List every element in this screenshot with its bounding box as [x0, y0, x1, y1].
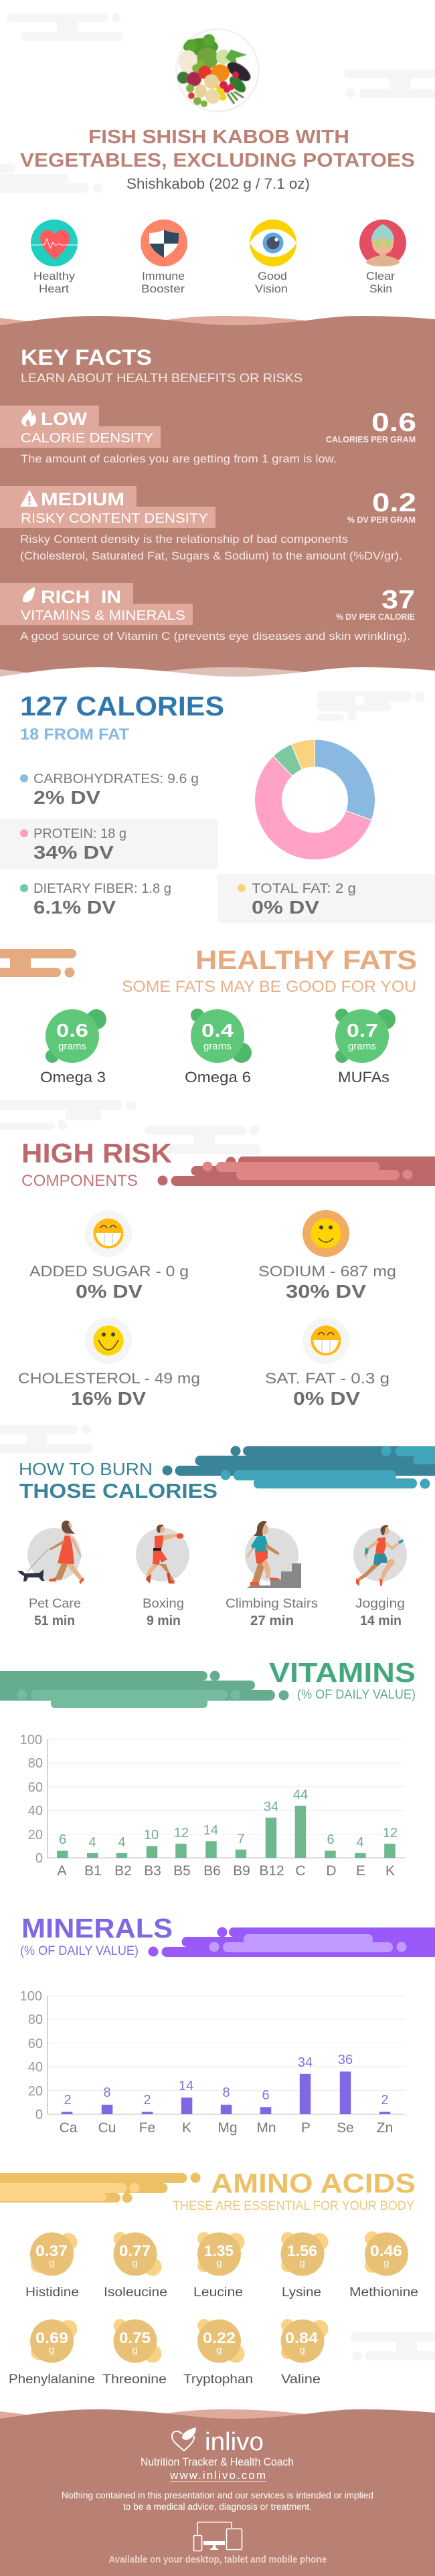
x axis labels — [60, 2120, 393, 2136]
title: FISH SHISH KABOB WITH — [88, 126, 349, 148]
bar value labels: 14 — [203, 1823, 218, 1838]
benefit: good vision: Good — [258, 270, 287, 282]
x axis labels: C — [295, 1863, 306, 1879]
amino acid: methionine — [349, 2231, 418, 2300]
x axis labels: Zn — [377, 2120, 393, 2136]
fat: omega 3: Omega 3 — [40, 1069, 106, 1086]
background cloud: above high risk — [145, 1126, 261, 1154]
decorative bars: vitamins — [0, 1670, 289, 1708]
benefit: good vision: Vision — [255, 282, 288, 295]
icon: grinning face — [94, 1218, 123, 1249]
y axis labels: 100 — [20, 1733, 42, 1747]
activity: climbing stairs: 27 min — [250, 1614, 294, 1628]
amino acid: isoleucine: g — [133, 2257, 138, 2269]
subheading: healthy fats: SOME FATS MAY BE GOOD FOR YOU — [122, 978, 416, 996]
fact: medium risky content density: 0.2 — [372, 489, 416, 517]
panel: healthy fats — [0, 946, 417, 1086]
y axis labels: 80 — [28, 1756, 43, 1771]
benefit: clear skin — [359, 220, 406, 295]
bar value labels: 14 — [179, 2079, 193, 2093]
bar value labels: 6 — [262, 2088, 270, 2103]
icon: stairs and woman — [246, 1521, 301, 1588]
legend: total fat — [217, 874, 435, 923]
bar value labels: 4 — [88, 1835, 96, 1850]
amino acid: valine — [281, 2319, 328, 2387]
bar value labels: 10 — [144, 1828, 159, 1842]
fact: rich in vitamins and minerals: % DV PER CALORIE — [336, 612, 415, 622]
decorative cloud: healthy fats — [0, 949, 76, 977]
bar value labels: 2 — [64, 2093, 72, 2108]
amino acid: methionine: g — [383, 2257, 389, 2269]
bar value labels — [64, 2053, 389, 2108]
benefit: healthy heart: Heart — [39, 282, 69, 295]
amino acid: histidine — [25, 2233, 79, 2300]
amino acid: histidine: g — [49, 2257, 54, 2269]
fact: rich in vitamins and minerals: VITAMINS & MINERALS — [21, 608, 185, 623]
subheading: components: COMPONENTS — [21, 1172, 138, 1190]
decorative bars: burn — [162, 1446, 435, 1488]
legend: carbohydrates: CARBOHYDRATES: 9.6 g — [33, 772, 199, 786]
legend: dietary fiber: DIETARY FIBER: 1.8 g — [33, 881, 171, 896]
fact: medium risky content density: MEDIUM — [41, 489, 124, 509]
fact: rich in vitamins and minerals: RICH IN — [41, 587, 121, 607]
y axis labels: 100 — [20, 1989, 42, 2004]
y axis labels: 40 — [28, 2060, 43, 2075]
decorative bars: high risk — [158, 1156, 435, 1186]
activity: boxing: Boxing — [143, 1597, 184, 1611]
amino acid: tryptophan — [183, 2319, 253, 2387]
icon: warning triangle — [20, 490, 38, 507]
amino acid: leucine: 1.35 — [204, 2242, 234, 2259]
bar value labels: 8 — [222, 2085, 230, 2100]
activity: boxing: 9 min — [147, 1614, 181, 1628]
y axis labels: 80 — [28, 2012, 43, 2027]
amino acid: isoleucine: Isoleucine — [104, 2286, 167, 2300]
risk item: cholesterol — [18, 1317, 200, 1409]
fat: mufas: 0.7 — [347, 1020, 378, 1041]
legend: carbohydrates: 2% DV — [33, 787, 100, 808]
x axis labels: K — [385, 1863, 395, 1879]
amino acid: valine: 0.84 — [285, 2329, 318, 2346]
heading: how to burn: HOW TO BURN — [19, 1459, 153, 1479]
heading: vitamins: VITAMINS — [269, 1657, 416, 1688]
amino acid: phenylalanine: 0.69 — [35, 2329, 68, 2346]
x axis labels: Ca — [60, 2120, 78, 2136]
bar value labels: 44 — [293, 1788, 308, 1802]
x axis labels: P — [301, 2120, 311, 2136]
subheading: 18 from fat: 18 FROM FAT — [20, 725, 129, 744]
benefit: immune booster: Booster — [141, 282, 185, 295]
benefit: immune booster: Immune — [142, 270, 185, 282]
fat: mufas — [335, 1009, 396, 1086]
panel: calories — [0, 691, 435, 923]
amino acid: threonine: g — [133, 2344, 138, 2356]
amino acid: threonine: Threonine — [102, 2373, 167, 2387]
icon: big smile face — [94, 1325, 123, 1356]
bar value labels: 4 — [118, 1835, 126, 1850]
y axis labels — [20, 1989, 43, 2122]
panel: high risk components — [18, 1138, 435, 1409]
fact: medium risky content density: Risky Content density is the relationship of bad components — [20, 533, 348, 545]
amino acid: phenylalanine — [9, 2320, 95, 2387]
fact: low calorie density: 0.6 — [371, 408, 416, 437]
amino acid: valine: Valine — [281, 2373, 321, 2387]
x axis labels: K — [182, 2120, 191, 2136]
benefit: immune booster — [141, 220, 187, 295]
x axis labels: Mg — [217, 2120, 238, 2136]
icon: jogger — [356, 1525, 404, 1587]
x axis labels: B6 — [203, 1863, 221, 1879]
title: VEGETABLES, EXCLUDING POTATOES — [20, 150, 415, 171]
bar value labels: 34 — [264, 1800, 278, 1814]
risk item: sodium: 30% DV — [286, 1281, 366, 1302]
icon: boxer — [146, 1525, 183, 1583]
panel: footer — [0, 2409, 435, 2576]
amino acid: leucine — [193, 2232, 245, 2300]
fat: omega 3: 0.6 — [56, 1020, 88, 1041]
benefit: clear skin: Clear — [366, 270, 395, 282]
bar chart: vitamins — [20, 1733, 405, 1879]
icon: grinning face — [311, 1325, 341, 1356]
fact: rich in vitamins and minerals: A good source of Vitamin C (prevents eye diseases and skin wrinkling). — [20, 630, 410, 642]
subheading: percent of daily value: (% OF DAILY VALUE) — [20, 1944, 139, 1958]
x axis labels: B2 — [114, 1863, 132, 1879]
icon: smiling face — [311, 1218, 341, 1249]
background cloud: calories — [317, 691, 424, 721]
bar value labels: 2 — [381, 2093, 389, 2108]
x axis labels: B5 — [173, 1863, 191, 1879]
benefit: healthy heart — [31, 220, 78, 295]
activity: climbing stairs: Climbing Stairs — [226, 1597, 318, 1611]
amino acid: tryptophan: 0.22 — [203, 2329, 236, 2346]
risk item: sodium — [258, 1210, 396, 1302]
activity: jogging: 14 min — [360, 1614, 402, 1628]
background cloud: amino acids right — [351, 2332, 435, 2360]
risk item: cholesterol: 16% DV — [71, 1388, 146, 1409]
fat: omega 3 — [40, 1009, 106, 1086]
x axis labels — [57, 1863, 395, 1879]
food photo: vegetables in a circle — [177, 29, 258, 111]
background cloud: below healthy fats — [0, 1100, 137, 1130]
amino acid: methionine: Methionine — [349, 2286, 418, 2300]
bars — [57, 1806, 396, 1858]
activity: climbing stairs — [226, 1521, 318, 1628]
risk item: saturated fat — [265, 1317, 389, 1409]
subheading: key facts: LEARN ABOUT HEALTH BENEFITS OR RISKS — [21, 371, 302, 385]
legend: protein — [0, 819, 218, 869]
tagline: Nutrition Tracker & Health Coach — [141, 2456, 294, 2468]
donut chart: macronutrients — [255, 740, 375, 860]
fact: medium risky content density: RISKY CONTENT DENSITY — [21, 511, 208, 526]
decorative bars: minerals — [149, 1927, 435, 1957]
bar value labels: 34 — [298, 2055, 313, 2070]
benefit: good vision — [250, 220, 296, 295]
panel: minerals — [20, 1913, 435, 2136]
background cloud: above burn section — [0, 1425, 93, 1453]
wave: top edge of key facts panel — [0, 316, 435, 336]
y axis labels: 20 — [28, 2084, 43, 2099]
activity: pet care: 51 min — [34, 1614, 75, 1628]
amino acid: tryptophan: Tryptophan — [183, 2373, 253, 2387]
bar value labels: 8 — [103, 2085, 111, 2100]
x axis labels: B1 — [84, 1863, 102, 1879]
x axis labels: Se — [337, 2120, 354, 2136]
heading: those calories: THOSE CALORIES — [19, 1479, 217, 1502]
bar value labels: 6 — [59, 1832, 66, 1847]
activity: boxing — [136, 1525, 189, 1628]
amino acid: isoleucine — [104, 2232, 167, 2300]
fat: omega 3: grams — [58, 1041, 86, 1052]
x axis labels: A — [57, 1863, 67, 1879]
fact: rich in vitamins and minerals — [0, 583, 415, 642]
decorative bars: amino acids — [0, 2172, 201, 2203]
bar value labels: 6 — [327, 1832, 335, 1847]
legend: total fat: 0% DV — [252, 897, 319, 918]
wave: top edge of footer — [0, 2409, 435, 2429]
amino acid: leucine: Leucine — [193, 2286, 243, 2300]
legend: dietary fiber: 6.1% DV — [33, 897, 116, 918]
amino acid: threonine: 0.75 — [119, 2329, 151, 2346]
title — [20, 126, 415, 171]
amino acid: phenylalanine: g — [49, 2344, 54, 2356]
amino acid: histidine: Histidine — [25, 2286, 79, 2300]
y axis labels: 20 — [28, 1828, 43, 1842]
amino acid: leucine: g — [216, 2257, 222, 2269]
fact: low calorie density: CALORIE DENSITY — [21, 430, 153, 446]
bar value labels: 36 — [338, 2053, 353, 2067]
fact: low calorie density: The amount of calories you are getting from 1 gram is low. — [21, 453, 337, 465]
bar value labels: 2 — [143, 2093, 151, 2108]
fat: omega 6: 0.4 — [201, 1020, 234, 1041]
y axis labels: 0 — [35, 2108, 43, 2122]
benefit: clear skin: Skin — [369, 282, 392, 295]
disclaimer — [62, 2490, 373, 2512]
risk item: added sugar — [29, 1210, 189, 1302]
website link: www.inlivo.com — [169, 2469, 266, 2482]
fact: low calorie density: LOW — [41, 409, 88, 429]
panel: key facts — [0, 316, 435, 687]
amino acid: isoleucine: 0.77 — [119, 2242, 151, 2259]
background cloud: top right — [344, 70, 435, 98]
background cloud: top left — [7, 13, 123, 41]
x axis labels: B9 — [233, 1863, 250, 1879]
icon: desktop, tablet and phone — [194, 2522, 242, 2551]
x axis labels: B12 — [259, 1863, 284, 1879]
activity: jogging: Jogging — [355, 1597, 405, 1611]
risk item: saturated fat: 0% DV — [293, 1388, 360, 1409]
logo: inlivo heart and leaf — [172, 2427, 264, 2456]
fact: medium risky content density — [0, 486, 416, 562]
fat: omega 6 — [185, 1009, 252, 1086]
x axis labels: E — [356, 1863, 365, 1879]
x axis labels: B3 — [144, 1863, 161, 1879]
bar value labels — [59, 1788, 398, 1850]
heading: minerals: MINERALS — [21, 1913, 173, 1944]
fact: low calorie density — [0, 406, 416, 465]
risk item: added sugar: ADDED SUGAR - 0 g — [29, 1263, 189, 1280]
heading: amino acids: AMINO ACIDS — [211, 2168, 416, 2199]
subtitle: serving size: Shishkabob (202 g / 7.1 oz) — [126, 175, 310, 192]
subheading: amino acids: THESE ARE ESSENTIAL FOR YOUR BODY — [173, 2199, 414, 2213]
y axis labels: 0 — [35, 1851, 43, 1866]
x axis labels: D — [326, 1863, 337, 1879]
disclaimer: to be a medical advice, diagnosis or treatment. — [123, 2502, 312, 2512]
bar value labels: 4 — [356, 1835, 364, 1850]
icon: flame — [21, 409, 36, 426]
disclaimer: Nothing contained in this presentation and our services is intended or implied — [62, 2490, 373, 2500]
amino acid: valine: g — [300, 2344, 305, 2356]
fact: low calorie density: CALORIES PER GRAM — [326, 434, 416, 444]
legend: protein: 34% DV — [33, 842, 114, 863]
heading: 127 calories: 127 CALORIES — [20, 691, 224, 721]
amino acid: lysine: Lysine — [282, 2286, 321, 2300]
x axis labels: Fe — [139, 2120, 155, 2136]
bar value labels: 7 — [237, 1832, 245, 1847]
fat: mufas: grams — [348, 1041, 376, 1052]
risk item: added sugar: 0% DV — [76, 1281, 143, 1302]
fact: medium risky content density: % DV PER GRAM — [347, 515, 416, 525]
y axis labels — [20, 1733, 43, 1866]
activity: pet care — [17, 1521, 84, 1628]
bar value labels: 12 — [383, 1826, 398, 1840]
amino acid: lysine: 1.56 — [287, 2242, 317, 2259]
legend: carbohydrates — [20, 772, 199, 808]
bar chart: minerals — [20, 1989, 405, 2136]
availability note: Available on your desktop, tablet and mobile phone — [108, 2555, 327, 2565]
amino acid: lysine — [281, 2232, 328, 2300]
bars — [62, 2071, 390, 2114]
activity: pet care: Pet Care — [29, 1597, 81, 1611]
fat: omega 6: Omega 6 — [185, 1069, 251, 1086]
heading: healthy fats: HEALTHY FATS — [195, 946, 417, 975]
y axis labels: 60 — [28, 1780, 43, 1795]
panel: vitamins — [0, 1657, 416, 1879]
subheading: percent of daily value: (% OF DAILY VALUE) — [297, 1688, 416, 1702]
amino acid: tryptophan: g — [216, 2344, 222, 2356]
fat: omega 6: grams — [203, 1041, 232, 1052]
fact: rich in vitamins and minerals: 37 — [381, 586, 415, 614]
amino acid: phenylalanine: Phenylalanine — [9, 2373, 95, 2387]
legend: dietary fiber — [20, 881, 171, 918]
legend: total fat: TOTAL FAT: 2 g — [252, 881, 356, 896]
logo: inlivo heart and leaf: inlivo — [205, 2428, 264, 2456]
panel: how to burn those calories — [17, 1446, 435, 1628]
heading: key facts: KEY FACTS — [21, 345, 152, 369]
x axis labels: Mn — [256, 2120, 276, 2136]
amino acid: methionine: 0.46 — [370, 2242, 402, 2259]
risk item: cholesterol: CHOLESTEROL - 49 mg — [18, 1370, 200, 1387]
amino acid: histidine: 0.37 — [35, 2242, 68, 2259]
risk item: sodium: SODIUM - 687 mg — [258, 1263, 396, 1280]
y axis labels: 40 — [28, 1804, 43, 1818]
fat: mufas: MUFAs — [338, 1069, 389, 1086]
activity: jogging — [353, 1525, 407, 1628]
amino acid: threonine — [102, 2319, 167, 2387]
risk item: saturated fat: SAT. FAT - 0.3 g — [265, 1370, 389, 1387]
legend: protein: PROTEIN: 18 g — [33, 827, 126, 841]
wave: bottom edge of key facts panel — [0, 667, 435, 687]
fact: medium risky content density: (Cholesterol, Saturated Fat, Sugars & Sodium) to the amount (%DV/gr). — [20, 550, 402, 562]
panel: amino acids — [0, 2168, 435, 2387]
amino acid: lysine: g — [300, 2257, 305, 2269]
heading: high risk: HIGH RISK — [21, 1138, 172, 1169]
x axis labels: Cu — [98, 2120, 116, 2136]
background cloud: behind title left — [0, 164, 102, 193]
icon: woman walking dog — [17, 1521, 84, 1584]
benefit: healthy heart: Healthy — [33, 270, 76, 282]
bar value labels: 12 — [174, 1826, 189, 1840]
icon: leaf — [23, 587, 35, 602]
y axis labels: 60 — [28, 2037, 43, 2051]
